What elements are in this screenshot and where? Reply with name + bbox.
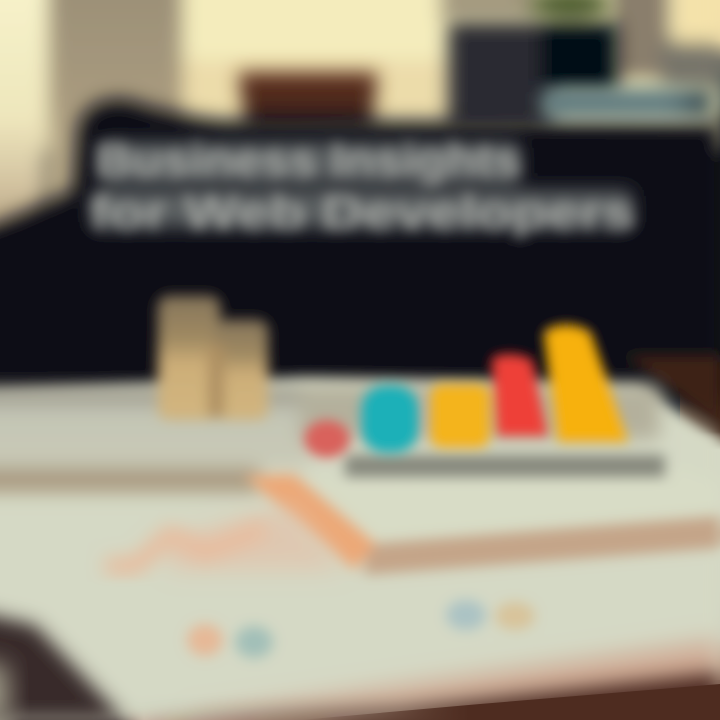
bar chart model bbox=[304, 325, 628, 458]
background bowl bbox=[238, 72, 378, 130]
background books bbox=[542, 88, 712, 118]
small red bar bbox=[304, 420, 350, 458]
background wall and window bbox=[0, 0, 720, 240]
right legend dots bbox=[446, 600, 535, 630]
title text: for Web Developers bbox=[90, 186, 635, 238]
dark table edge bbox=[0, 610, 720, 720]
yellow bar bbox=[430, 384, 490, 448]
wooden blocks bbox=[158, 296, 268, 420]
title text: Business Insights bbox=[96, 134, 521, 186]
model base bbox=[345, 455, 665, 477]
wooden floor at bottom edge bbox=[300, 684, 720, 720]
title text bbox=[90, 134, 635, 238]
tall yellow bar bbox=[544, 325, 628, 442]
pale line chart bbox=[105, 505, 345, 570]
left legend dots bbox=[187, 624, 273, 658]
red bar bbox=[492, 354, 548, 436]
teal bar bbox=[361, 385, 419, 453]
background vase and plant bbox=[448, 0, 618, 127]
table surface bbox=[0, 355, 720, 720]
paper stack bbox=[244, 468, 720, 575]
dark title panel bbox=[0, 99, 720, 400]
